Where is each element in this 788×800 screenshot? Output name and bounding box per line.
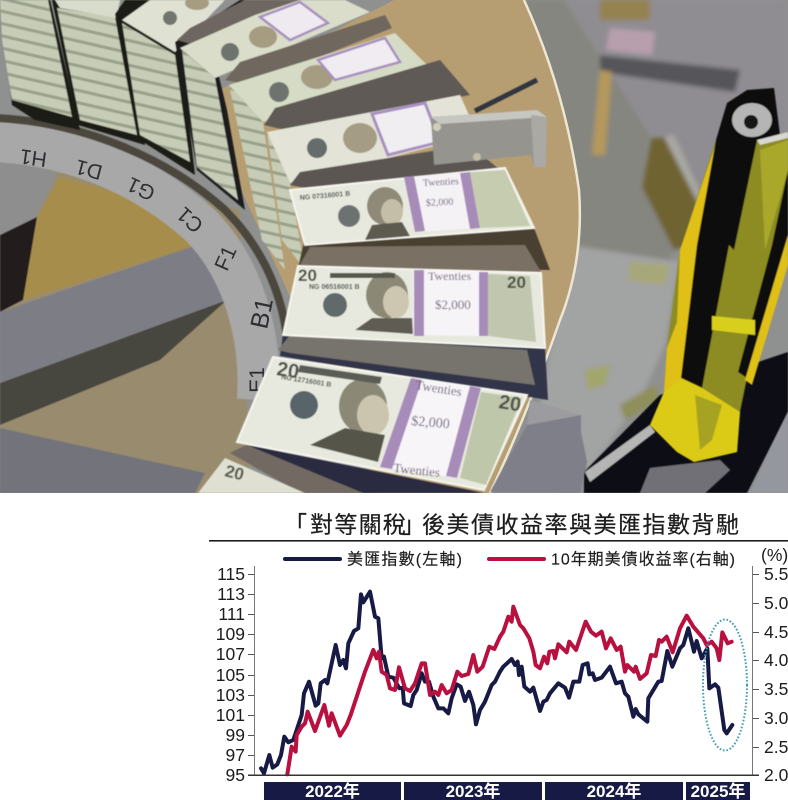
steel ring floor and bars	[0, 118, 288, 493]
yellow screwdriver	[650, 88, 788, 462]
dollar bundle: top: NG 07316001 B	[300, 191, 351, 202]
right axis: treasury yield: 3.0	[764, 708, 788, 728]
right axis: treasury yield	[752, 564, 788, 785]
legend: US dollar index: 美匯指數(左軸)	[347, 550, 462, 568]
left axis: US dollar index: 105	[216, 665, 245, 685]
right axis: treasury yield: 4.0	[764, 650, 788, 670]
stacks of bundled bills, upper row	[0, 0, 500, 270]
ring labels: C1	[173, 202, 208, 237]
ring labels: E1	[246, 367, 269, 393]
year band: 2022	[264, 781, 401, 800]
dollar bundle: middle: $2,000	[435, 297, 471, 312]
chart title: 」	[402, 512, 425, 538]
year band: 2023	[404, 781, 542, 800]
x axis baseline	[248, 774, 759, 776]
dollar bundle: top: $2,000	[426, 197, 454, 209]
right axis: treasury yield: 3.5	[764, 679, 788, 699]
metal block and machine base, lower right	[490, 352, 788, 493]
dollar bundle: front: Twenties	[415, 377, 463, 399]
dollar bundle: front: Twenties	[393, 460, 441, 480]
right axis: treasury yield: 4.5	[764, 622, 788, 642]
callout: dotted ellipse around 2025 divergence	[703, 620, 747, 750]
left axis: US dollar index: 115	[217, 564, 245, 584]
right axis: treasury yield: 2.0	[764, 765, 788, 785]
right axis: treasury yield: 5.5	[764, 564, 788, 584]
shadows and dividers between bundles	[230, 228, 550, 493]
line: 10-year treasury yield	[287, 607, 732, 774]
ring labels: F1	[211, 242, 242, 274]
left axis: US dollar index	[216, 564, 254, 785]
dollar bundle: front: 20	[275, 358, 301, 383]
left axis: US dollar index: 99	[226, 725, 245, 745]
right axis: treasury yield: 2.5	[764, 737, 788, 757]
dollar bundle: front: 20	[497, 391, 523, 416]
year band: 2024	[545, 781, 683, 800]
left axis: US dollar index: 111	[218, 604, 245, 624]
dollar bundle: front: $2,000	[411, 414, 450, 432]
ring labels: G1	[124, 172, 159, 205]
title rule	[209, 540, 788, 542]
dollar bundle: front	[237, 357, 527, 490]
legend: 10-year treasury yield: 10年期美債收益率(右軸)	[551, 550, 735, 568]
ring labels	[19, 144, 279, 393]
metal bracket with rod	[431, 80, 547, 167]
ring labels: B1	[245, 295, 279, 331]
chart title: 「	[284, 512, 307, 538]
dollar bundle: bottom, cut off: 20	[223, 461, 246, 484]
dollar bundle: top	[290, 168, 534, 245]
ring labels: D1	[73, 155, 105, 184]
left axis: US dollar index: 95	[226, 765, 245, 785]
chart title: 後美債收益率與美匯指數背馳	[422, 512, 740, 538]
dollar bundle: middle	[283, 266, 545, 348]
left axis: US dollar index: 97	[226, 745, 245, 765]
left axis: US dollar index: 101	[216, 705, 245, 725]
dollar bundle: top: Twenties	[423, 176, 459, 189]
photo background: blurred right side	[526, 0, 742, 468]
dollar bundle: bottom, cut off	[198, 458, 305, 493]
ring labels: H1	[19, 144, 48, 171]
right axis: treasury yield: 5.0	[764, 593, 788, 613]
line: US dollar index	[261, 592, 732, 773]
left axis: US dollar index: 103	[216, 685, 245, 705]
photo: stacks of US dollar bills on a sorting machine	[0, 0, 788, 493]
dollar bundle: middle: NG 06516001 B	[309, 284, 360, 291]
dollar bundle: middle: 20	[298, 266, 317, 285]
dollar bundle: middle: Twenties	[428, 269, 471, 283]
left axis: US dollar index: 107	[216, 644, 245, 664]
left axis: US dollar index: 113	[217, 584, 245, 604]
dollar bundle: middle: 20	[507, 273, 526, 292]
left axis: US dollar index: 109	[216, 624, 245, 644]
tan curved panel	[200, 0, 580, 493]
chart title: 對等關稅	[310, 512, 407, 538]
right axis unit: (%)	[761, 545, 788, 565]
dollar bundle: front: NG 12716001 B	[281, 374, 332, 389]
